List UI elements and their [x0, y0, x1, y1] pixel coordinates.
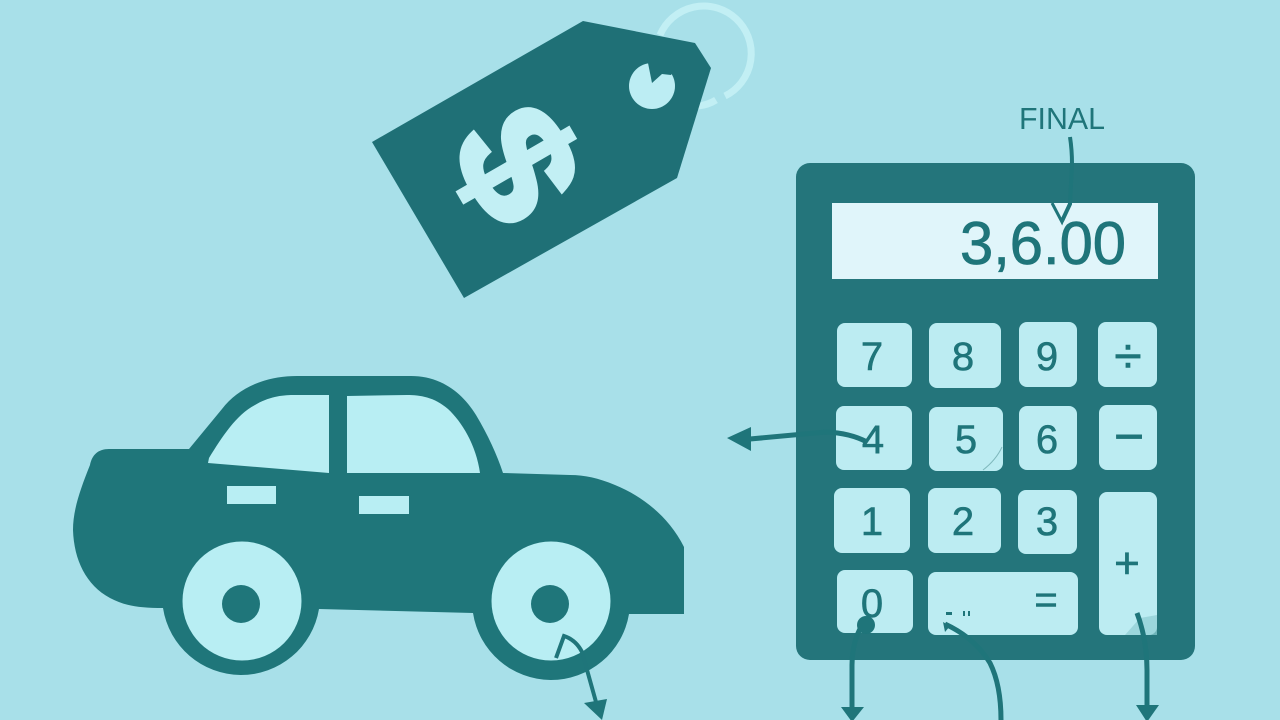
key labels: +	[1114, 539, 1140, 588]
icon: car	[73, 376, 684, 680]
scratch on key 5	[983, 447, 1002, 470]
arrow: plus key down	[1136, 613, 1159, 720]
key labels: =	[1034, 578, 1058, 622]
icon: price tag	[372, 6, 751, 298]
tag hole	[629, 58, 680, 109]
key labels: 8	[952, 335, 974, 379]
rear wheel	[182, 542, 302, 660]
car body	[73, 376, 684, 680]
key labels	[861, 328, 1144, 626]
key labels: 6	[1036, 418, 1058, 462]
label: FINAL: FINAL	[1019, 101, 1105, 136]
arrow: wide key curved down	[943, 622, 1001, 720]
door handle front	[359, 496, 409, 514]
arrow: car wheel down	[556, 636, 607, 720]
key labels: 1	[861, 500, 883, 544]
front side window	[347, 395, 480, 473]
keys	[834, 322, 1157, 635]
calculator body	[796, 163, 1195, 660]
display	[832, 203, 1158, 279]
key labels: 4	[862, 418, 884, 462]
arrow: key 0 down	[841, 616, 875, 720]
arrow: FINAL to display	[1052, 137, 1072, 222]
small marks on wide key	[946, 611, 970, 616]
display value: 3,6.00	[960, 210, 1126, 277]
tag body	[372, 21, 711, 298]
key labels: 7	[861, 335, 883, 379]
key labels: 9	[1036, 335, 1058, 379]
dollar sign: $	[417, 77, 618, 251]
rear side window	[208, 395, 329, 473]
front wheel	[492, 542, 610, 660]
key labels: 0	[861, 582, 883, 626]
key labels: −	[1114, 408, 1144, 466]
key labels: 2	[952, 500, 974, 544]
door handle rear	[227, 486, 276, 504]
panel: calculator	[796, 163, 1195, 660]
key labels: 5	[955, 418, 977, 462]
arrow: key 4 to left	[727, 427, 867, 451]
shadow on plus key	[1125, 615, 1157, 635]
tag ring	[660, 6, 751, 106]
key labels: ÷	[1114, 328, 1142, 384]
key labels: 3	[1036, 500, 1058, 544]
